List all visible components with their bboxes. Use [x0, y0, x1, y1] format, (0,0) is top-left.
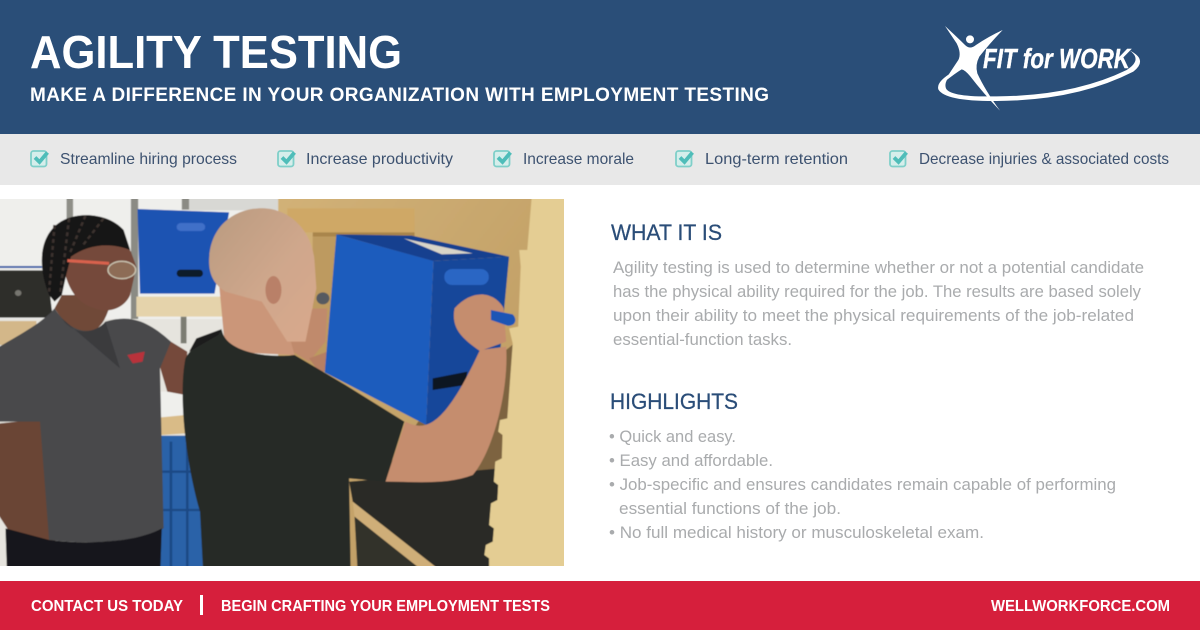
- text block: what it is: [613, 259, 1144, 349]
- list: highlights: • Quick and easy.: [609, 428, 736, 446]
- interior wood and mat: [378, 342, 516, 482]
- wooden upright with notches: [484, 185, 582, 582]
- list: highlights: • No full medical history or musculoskeletal exam.: [609, 524, 984, 542]
- list: highlights: • Job-specific and ensures candidates remain capable of performing: [609, 476, 1116, 494]
- heading: highlights: HIGHLIGHTS: [610, 389, 738, 414]
- website: WELLWORKFORCE.COM: [991, 598, 1170, 615]
- woman: [0, 215, 187, 582]
- benefit: decrease injuries: Decrease injuries & associated costs: [919, 151, 1169, 168]
- text block: what it is: Agility testing is used to determine whether or not a potential candidate: [613, 259, 1144, 277]
- man's other hand: [287, 308, 327, 362]
- list: highlights: • Easy and affordable.: [609, 452, 773, 470]
- text block: what it is: upon their ability to meet the physical requirements of the job-related: [613, 307, 1134, 325]
- title: AGILITY TESTING: [30, 26, 402, 78]
- benefit: increase productivity: Increase productivity: [306, 151, 453, 168]
- benefit: increase morale: Increase morale: [523, 151, 634, 168]
- benefits band: [0, 134, 1200, 185]
- subtitle: MAKE A DIFFERENCE IN YOUR ORGANIZATION WITH EMPLOYMENT TESTING: [30, 85, 769, 106]
- blue box: [325, 234, 509, 425]
- footer banner: [0, 581, 1200, 630]
- benefit: long-term retention: Long-term retention: [705, 151, 848, 168]
- header banner: [0, 0, 1200, 134]
- text block: what it is: essential-function tasks.: [613, 331, 792, 349]
- heading: what it is: WHAT IT IS: [611, 220, 722, 245]
- logo: Fit for Work: [938, 26, 1140, 111]
- list: highlights: [609, 428, 1116, 542]
- logo: Fit for Work: FIT for WORK: [983, 43, 1131, 74]
- text block: what it is: has the physical ability required for the job. The results are based solely: [613, 283, 1142, 301]
- list: highlights: essential functions of the job.: [619, 500, 841, 518]
- call to action detail: BEGIN CRAFTING YOUR EMPLOYMENT TESTS: [221, 598, 550, 615]
- man: [183, 208, 515, 582]
- call to action: CONTACT US TODAY: [31, 598, 184, 615]
- photo: two people at an agility test station: [0, 199, 564, 566]
- benefit: streamline hiring process: Streamline hiring process: [60, 151, 237, 168]
